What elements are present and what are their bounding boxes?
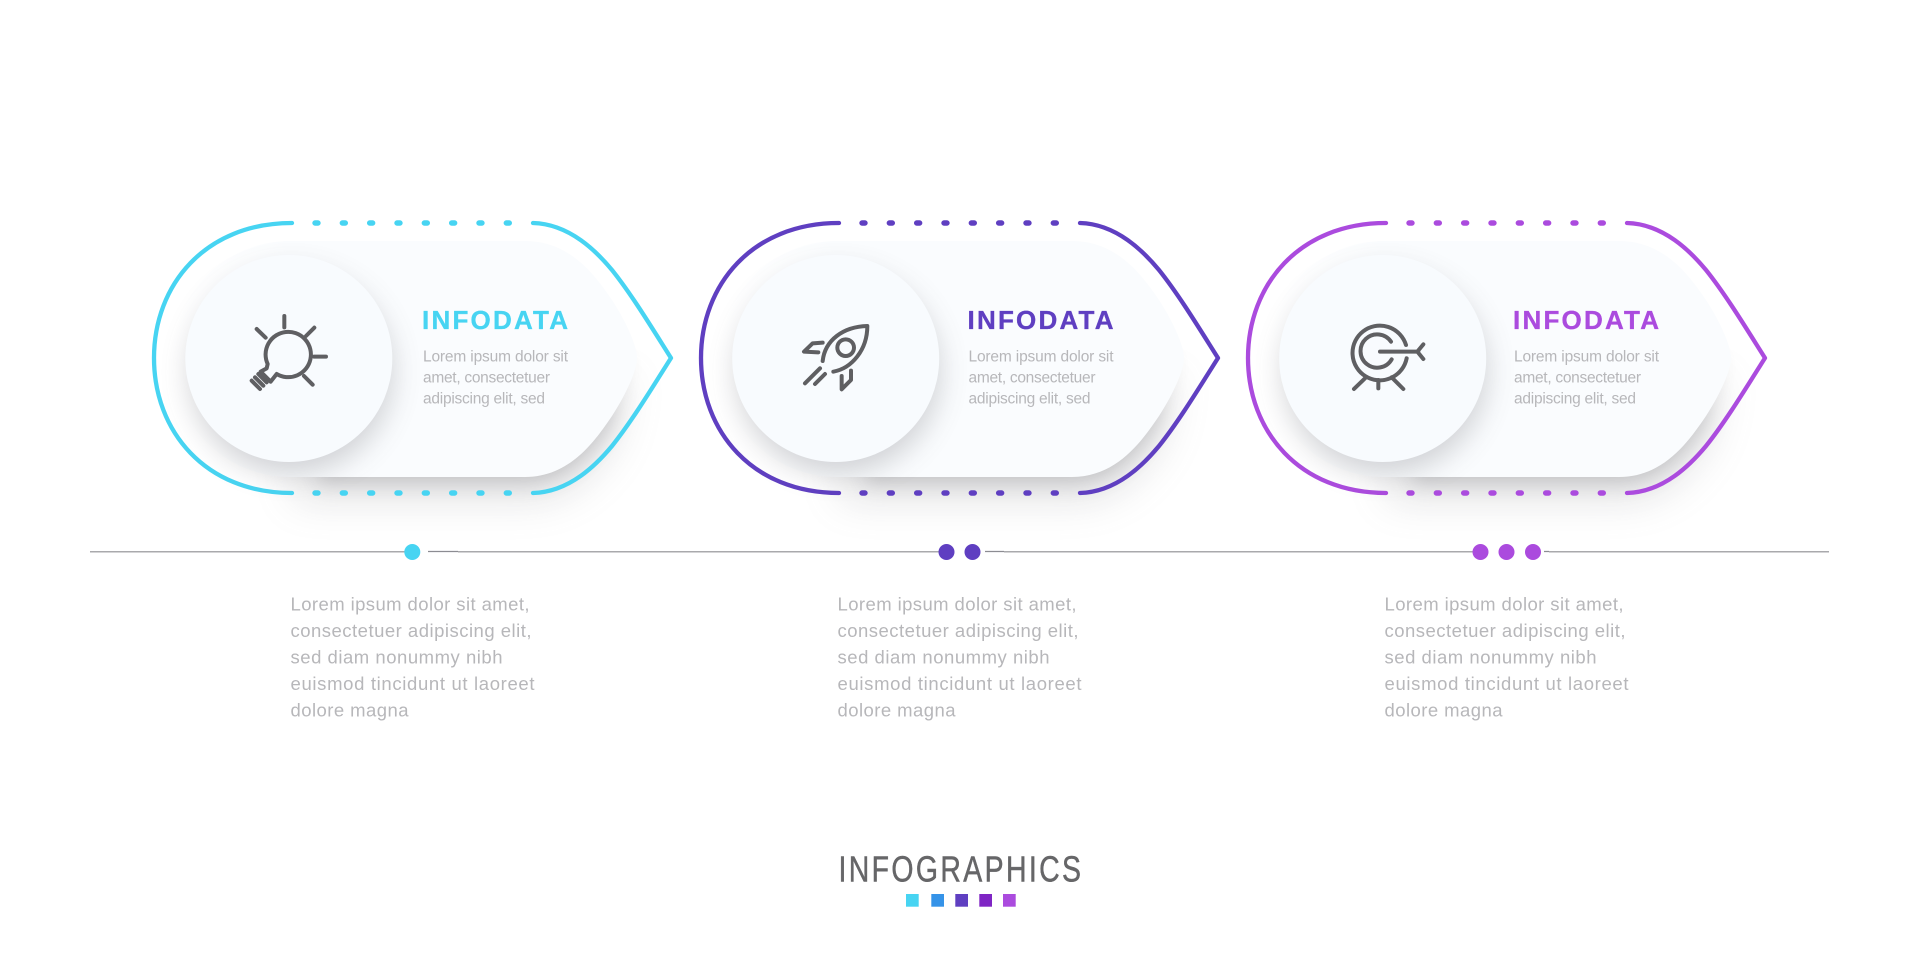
paragraph: step 2: consectetuer adipiscing elit, — [838, 620, 1078, 641]
dotted top and bottom edges — [1409, 223, 1606, 493]
text block: adipiscing elit, sed — [423, 390, 545, 408]
paragraph: step 1: consectetuer adipiscing elit, — [290, 620, 532, 641]
circle shadow — [1283, 270, 1487, 474]
heading: INFODATA — [1513, 305, 1659, 335]
circle shadow — [736, 270, 940, 474]
outline — [154, 223, 671, 493]
title: INFOGRAPHICS — [838, 849, 1083, 889]
paragraph: step 3: sed diam nonummy nibh — [1384, 646, 1596, 668]
paragraph: step 2: euismod tincidunt ut laoreet — [838, 673, 1082, 694]
icon: rocket — [804, 326, 867, 389]
text block: adipiscing elit, sed — [1514, 390, 1636, 408]
text block — [968, 348, 1114, 408]
circle — [1279, 255, 1486, 462]
panel body — [1266, 241, 1731, 477]
paragraph: step 1: Lorem ipsum dolor sit amet, — [290, 594, 530, 614]
text block: Lorem ipsum dolor sit — [423, 348, 569, 366]
heading: INFODATA — [968, 305, 1114, 335]
colour squares — [906, 894, 1016, 907]
timeline — [90, 544, 1829, 560]
paragraph: step 2: dolore magna — [838, 700, 956, 720]
paragraph: step 3 — [1384, 594, 1628, 720]
panel body — [719, 241, 1184, 477]
text block: Lorem ipsum dolor sit — [968, 348, 1114, 366]
text block: amet, consectetuer — [968, 370, 1096, 386]
dotted top and bottom edges — [862, 223, 1059, 493]
paragraph: step 3: dolore magna — [1384, 700, 1503, 720]
dotted top and bottom edges — [315, 223, 512, 493]
paragraph: step 1: euismod tincidunt ut laoreet — [290, 673, 534, 694]
paragraph: step 3: Lorem ipsum dolor sit amet, — [1384, 594, 1624, 614]
text block: amet, consectetuer — [1514, 370, 1641, 386]
paragraph: step 1: sed diam nonummy nibh — [290, 646, 502, 668]
panel: step 2 — [701, 223, 1218, 501]
text block — [423, 348, 569, 408]
paragraph: step 1 — [290, 594, 534, 720]
marker: step 1 — [404, 544, 420, 560]
panel: step 1 — [154, 223, 671, 501]
circle — [185, 255, 392, 462]
paragraph: step 3: euismod tincidunt ut laoreet — [1384, 673, 1628, 694]
marker: step 3 — [1472, 544, 1541, 560]
icon: target with arrow — [1353, 326, 1423, 389]
circle shadow — [189, 270, 393, 474]
paragraph: step 2: sed diam nonummy nibh — [838, 646, 1050, 668]
text block: amet, consectetuer — [423, 370, 550, 386]
heading: INFODATA — [422, 305, 568, 335]
text block: adipiscing elit, sed — [968, 390, 1090, 408]
text block: Lorem ipsum dolor sit — [1514, 348, 1660, 366]
outline — [1248, 223, 1765, 493]
paragraph: step 2: Lorem ipsum dolor sit amet, — [838, 594, 1076, 614]
panel shadow — [294, 356, 629, 501]
panel shadow — [841, 356, 1176, 501]
circle — [732, 255, 939, 462]
panel shadow — [1388, 356, 1723, 501]
paragraph: step 1: dolore magna — [290, 700, 409, 720]
outline — [701, 223, 1218, 493]
marker: step 2 — [938, 544, 980, 560]
panel body — [172, 241, 637, 477]
text block — [1514, 348, 1660, 408]
icon: light bulb — [252, 316, 326, 389]
paragraph: step 2 — [838, 594, 1082, 720]
panel: step 3 — [1248, 223, 1765, 501]
paragraph: step 3: consectetuer adipiscing elit, — [1384, 620, 1626, 641]
